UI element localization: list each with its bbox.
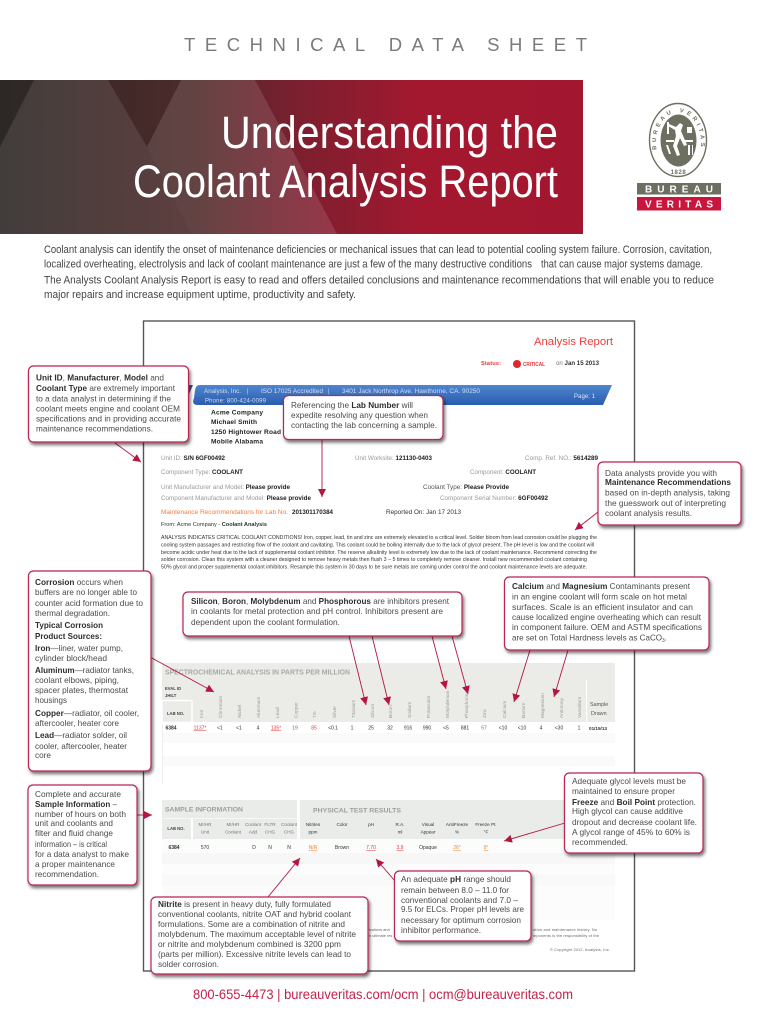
- element column headers: Magnesium: [540, 693, 546, 718]
- test values row: [168, 845, 488, 851]
- element column headers: Lead: [275, 707, 281, 718]
- table: sample information and physical test results: [162, 800, 615, 920]
- element values row: 1137*: [194, 726, 206, 732]
- element column headers: Potassium: [426, 696, 432, 718]
- callout: sample information: for a data analyst to make: [35, 849, 129, 859]
- test values row: N: [268, 845, 272, 851]
- customer address: Michael Smith: [211, 419, 257, 426]
- callout: corrosion: Corrosion occurs when: [35, 577, 123, 587]
- callout: calcium and magnesium: in component failure. OEM and ASTM specifications: [512, 622, 702, 632]
- callout: glycol: Freeze and Boil Point protection.: [572, 797, 696, 807]
- disclaimer and copyright: ation and maintenance history. No: [533, 927, 597, 932]
- column headers: Freeze Pt.: [475, 822, 497, 827]
- callout: sample information: filter and fluid change: [35, 828, 113, 838]
- lab header bar: |: [328, 389, 330, 395]
- element values row: <1: [217, 726, 223, 732]
- element column headers: Sodium: [407, 702, 413, 718]
- disclaimer and copyright: ications and: [369, 927, 390, 932]
- banner title: Understanding the: [221, 107, 558, 158]
- maintenance recommendations: 201301170384: [292, 509, 334, 516]
- element values row: 1: [351, 726, 354, 732]
- maintenance recommendations: cooling system passages and restricting flow of the coolant and cavitating. This coolant could be boiling internally due to the lack of glycol present. The pH level is low and the coolant will: [161, 542, 594, 548]
- callout: maintenance recommendations: Data analysts provide you with: [605, 468, 717, 478]
- callout: maintenance recommendations: coolant analysis results.: [605, 508, 692, 518]
- callout: corrosion: [28, 571, 151, 771]
- callout: unit id: Coolant Type are extremely important: [36, 383, 176, 393]
- callout: corrosion: housings: [35, 695, 67, 705]
- callout: lab number: Referencing the Lab Number will: [291, 400, 413, 410]
- lab header bar: ISO 17025 Accredited: [261, 389, 323, 395]
- element values row: 85: [311, 726, 317, 732]
- test values row: 7.70: [366, 845, 376, 851]
- intro text: localized overheating, electrolysis and lack of coolant maintenance are just a few of the many destructive conditions: [44, 258, 532, 270]
- test values row: 9°: [484, 845, 488, 851]
- column headers: MI/HR: [198, 822, 212, 827]
- status line: on Jan 15 2013: [556, 361, 600, 367]
- test values row: N/R: [309, 845, 318, 851]
- column headers: ppm: [309, 830, 318, 834]
- element values row: 4: [257, 726, 260, 732]
- report title: Analysis Report: [534, 336, 613, 348]
- callout: inhibitors: [183, 592, 462, 636]
- column headers: R.A.: [396, 822, 404, 827]
- unit and component fields: Unit Manufacturer and Model: Please provide: [161, 484, 291, 491]
- lab header bar: Phone: 800-424-0099: [205, 398, 267, 404]
- column headers: Coolant: [245, 822, 262, 827]
- column headers: [167, 822, 497, 834]
- column headers: Coolant: [225, 830, 242, 834]
- logo: Bureau Veritas: BUREAU VERITAS: [652, 108, 705, 150]
- banner: [0, 80, 583, 234]
- element column headers: Titanium: [351, 700, 357, 718]
- callout: glycol: [564, 773, 703, 853]
- callout: corrosion: cylinder block/head: [35, 653, 107, 663]
- unit and component fields: Component Type: COOLANT: [161, 469, 243, 476]
- element values row: [165, 726, 607, 732]
- callout: lab number: [284, 396, 443, 440]
- test values row: Brown: [335, 845, 349, 851]
- test values row: 26°: [453, 845, 461, 851]
- test values row: 570: [201, 845, 209, 851]
- callout: unit id: maintenance recommendations.: [36, 424, 153, 434]
- callout: pH: necessary for optimum corrosion: [401, 915, 521, 925]
- callout: lab number: contacting the lab concerning a sample.: [291, 420, 437, 430]
- column headers: MI/HR: [226, 822, 240, 827]
- table: spectrochemical analysis: EVAL ID: [165, 686, 181, 691]
- column headers: Add: [249, 830, 258, 834]
- intro text: that can cause major systems damage.: [541, 258, 703, 270]
- logo: Bureau Veritas: 1828: [671, 170, 686, 176]
- callout: glycol: Adequate glycol levels must be: [572, 776, 686, 786]
- unit and component fields: Unit ID: S/N 6GF00492: [161, 455, 226, 462]
- callout: pH: 9.5 for ELCs. Proper pH levels are: [401, 904, 524, 914]
- element values row: 916: [404, 726, 412, 732]
- column headers: Visual: [422, 822, 434, 827]
- test values row: 3.9: [397, 845, 404, 851]
- element column headers: Copper: [294, 702, 300, 718]
- callout: corrosion: Copper—radiator, oil cooler,: [35, 708, 139, 718]
- element values row: 57: [481, 726, 487, 732]
- callout: inhibitors: Silicon, Boron, Molybdenum and Phosphorous are inhibitors present: [191, 596, 450, 606]
- element column headers: Boron: [388, 705, 394, 718]
- intro text: [44, 244, 714, 301]
- unit and component fields: Comp. Ref. NO.: 5614289: [525, 455, 599, 462]
- callout: corrosion: Product Sources:: [35, 631, 102, 641]
- element values row: <10: [518, 726, 526, 732]
- customer address: 1250 Hightower Road: [211, 429, 281, 436]
- callout: sample information: information – is critical: [35, 839, 107, 849]
- callout: pH: conventional coolants and 7.0 –: [401, 895, 518, 905]
- callout: maintenance recommendations: [598, 462, 741, 525]
- element column headers: Zinc: [482, 708, 488, 718]
- lab header bar: [189, 385, 612, 405]
- status line: Status:: [481, 361, 501, 367]
- unit and component fields: Unit Worksite: 121130-0403: [355, 455, 433, 462]
- element column headers: Silver: [332, 706, 338, 718]
- callout: sample information: [28, 785, 137, 885]
- callout: calcium and magnesium: surfaces. Scale is an efficient insulator and can: [512, 602, 693, 612]
- page heading: technical data sheet: TECHNICAL DATA SHEET: [184, 34, 587, 55]
- callout: corrosion: cooler, aftercooler, heater: [35, 741, 127, 751]
- callout: sample information: Sample Information –: [35, 799, 117, 809]
- callout: sample information: unit and coolants and: [35, 818, 113, 828]
- callout: unit id: specifications and in providing accurate: [36, 414, 181, 424]
- callout: inhibitors: in coolants for metal protection and pH control. Inhibitors present are: [191, 606, 443, 616]
- lab header bar: 3401 Jack Northrop Ave. Hawthorne, CA. 90250: [342, 389, 481, 395]
- element column headers: Barium: [521, 703, 527, 718]
- column headers: °F: [484, 830, 489, 834]
- callout: glycol: A glycol range of 45% to 60% is: [572, 827, 690, 837]
- maintenance recommendations: Reported On: Jan 17 2013: [386, 509, 462, 516]
- column headers: Color: [337, 822, 348, 827]
- callout: calcium and magnesium: 3: [662, 638, 665, 644]
- maintenance recommendations: [161, 509, 597, 570]
- element values row: 6384: [165, 726, 177, 732]
- callout: sample information: recommendation.: [35, 869, 99, 879]
- element column headers: Molybdenum: [445, 691, 451, 718]
- element column headers: Chromium: [218, 696, 224, 718]
- element values row: <30: [555, 726, 563, 732]
- column headers: %: [455, 830, 459, 834]
- callout: sample information: a proper maintenance: [35, 859, 115, 869]
- element column headers: Antimony: [559, 697, 565, 718]
- column headers: LAB NO.: [167, 826, 185, 831]
- table: sample information and physical test results: SAMPLE INFORMATION: [165, 806, 243, 814]
- element column headers: Aluminum: [256, 697, 262, 718]
- element values row: 01/15/13: [589, 726, 607, 731]
- callout: pH: [394, 871, 531, 941]
- callout: lab number: expedite resolving any question when: [291, 410, 428, 420]
- callout: corrosion: Iron—liner, water pump,: [35, 643, 123, 653]
- callout: corrosion: buffers are no longer able to: [35, 587, 137, 597]
- customer address: [211, 410, 281, 446]
- test values row: Opaque: [419, 845, 437, 851]
- panel: sample analysis report document: [144, 321, 634, 971]
- element values row: 990: [423, 726, 431, 732]
- lab header bar: Page: 1: [574, 394, 596, 400]
- element values row: 4: [540, 726, 543, 732]
- element column headers: Vanadium: [577, 697, 583, 718]
- column headers: FLTR: [264, 822, 276, 827]
- column headers: Coolant: [281, 822, 298, 827]
- callout: corrosion: Lead—radiator solder, oil: [35, 730, 127, 740]
- callout: corrosion: Typical Corrosion: [35, 620, 103, 630]
- logo: Bureau Veritas: [637, 102, 721, 210]
- column headers: Nitrites: [306, 822, 321, 827]
- unit and component fields: Component: COOLANT: [470, 469, 536, 476]
- callout: calcium and magnesium: in an engine coolant will form scale on hot metal: [512, 592, 687, 602]
- callout: calcium and magnesium: Calcium and Magnesium Contaminants present: [512, 581, 691, 591]
- disclaimer and copyright: mponents is the responsibility of the: [533, 933, 599, 938]
- customer address: Mobile Alabama: [211, 438, 263, 446]
- callout: glycol: maintained to ensure proper: [572, 786, 675, 796]
- element values row: <5: [443, 726, 449, 732]
- test values row: D: [252, 845, 256, 851]
- callout: nitrite: Nitrite is present in heavy duty, fully formulated: [158, 899, 331, 909]
- callout: sample information: number of hours on both: [35, 809, 126, 819]
- callout: maintenance recommendations: Maintenance Recommendations: [605, 477, 731, 487]
- callout: nitrite: conventional coolants, nitrite OAT and hybrid coolant: [158, 909, 352, 919]
- footer contact line: 800-655-4473 | bureauveritas.com/ocm | ocm@bureauveritas.com: [193, 986, 573, 1002]
- callout: glycol: High glycol can cause additive: [572, 806, 683, 816]
- logo: Bureau Veritas: VERITAS: [645, 200, 713, 210]
- callout: pH: An adequate pH range should: [401, 874, 511, 884]
- callout: pH: inhibitor performance.: [401, 925, 481, 935]
- table: spectrochemical analysis: JHILT: [165, 693, 177, 698]
- maintenance recommendations: 50% glycol and proper supplemental coolant inhibitors. Resample this system in 30 days to be sure metals are coming under control the and coolant maintenance levels are adequate.: [161, 564, 587, 570]
- table: spectrochemical analysis: SPECTROCHEMICAL ANALYSIS IN PARTS PER MILLION: [165, 670, 350, 676]
- test values row: N: [287, 845, 291, 851]
- element values row: <10: [499, 726, 507, 732]
- maintenance recommendations: From: Acme Company - Coolant Analysis: [161, 522, 267, 528]
- element column headers: Silicon: [370, 704, 376, 718]
- unit and component fields: [161, 455, 599, 502]
- callout: pH: remain between 8.0 – 11.0 for: [401, 885, 509, 895]
- callout: corrosion: spacer plates, thermostat: [35, 685, 129, 695]
- callout: nitrite: solder corrosion.: [158, 959, 219, 969]
- element values row: 32: [387, 726, 393, 732]
- column headers: CHG: [265, 830, 276, 834]
- column headers: CHG: [284, 830, 295, 834]
- unit and component fields: Component Serial Number: 6GF00492: [440, 495, 549, 502]
- arrows from callouts to report: [115, 440, 598, 897]
- element values row: 25: [368, 726, 374, 732]
- callout: nitrite: or nitrite and molybdenum combined is 3200 ppm: [158, 939, 341, 949]
- callout: glycol: recommended.: [572, 837, 628, 847]
- element column headers: Nickel: [237, 705, 243, 718]
- callout: unit id: to a data analyst in determining if the: [36, 394, 171, 404]
- maintenance recommendations: Maintenance Recommendations for Lab No.: [161, 509, 288, 516]
- status line: [481, 360, 600, 368]
- callout: calcium and magnesium: are set on Total Hardness levels as CaCO: [512, 632, 666, 642]
- element values row: <0.1: [328, 726, 338, 732]
- callout: calcium and magnesium: cause localized engine overheating which can result: [512, 612, 702, 622]
- element column headers: Calcium: [502, 701, 508, 718]
- element values row: 19: [292, 726, 298, 732]
- element column headers: [199, 689, 583, 718]
- maintenance recommendations: ANALYSIS INDICATES CRITICAL COOLANT CONDITIONS! Iron, copper, lead, tin and zinc are extremely elevated to a critical level. Solder bloom from lead corrosion could be plugging the: [161, 535, 597, 541]
- callout: corrosion: aftercooler, heater core: [35, 718, 119, 728]
- element values row: 881: [461, 726, 469, 732]
- disclaimer and copyright: e ultimate res: [369, 933, 392, 938]
- callout: unit id: coolant meets engine and coolant OEM: [36, 404, 180, 414]
- banner title: Coolant Analysis Report: [133, 156, 558, 207]
- column headers: pH: [368, 822, 374, 827]
- callout: corrosion: Aluminum—radiator tanks,: [35, 665, 134, 675]
- callout: calcium and magnesium: [504, 577, 709, 650]
- element column headers: Tin: [312, 711, 318, 718]
- element column headers: Iron: [199, 709, 205, 718]
- test values row: 6384: [168, 845, 180, 851]
- callout: corrosion: coolant elbows, piping,: [35, 675, 119, 685]
- unit and component fields: Coolant Type: Please Provide: [423, 484, 510, 491]
- status line: CRITICAL: [523, 362, 546, 368]
- table: spectrochemical analysis: LAB NO.: [167, 711, 184, 716]
- disclaimer and copyright: © Copyright 2012, Analysts, Inc.: [550, 947, 610, 952]
- callout: unit id: [28, 366, 188, 442]
- callout: unit id: Unit ID, Manufacturer, Model and: [36, 372, 164, 382]
- intro text: major repairs and increase equipment uptime, productivity and safety.: [44, 289, 356, 301]
- maintenance recommendations: become acidic under heat due to the lack of supplemental coolant inhibitor. The reserve alkalinity level is extremely low due to the lack of coolant maintenance. Recommend correcting the: [161, 550, 597, 556]
- column headers: AntiFreeze: [446, 822, 469, 827]
- banner title: [133, 107, 558, 207]
- column headers: Appear: [421, 830, 436, 834]
- callout: inhibitors: dependent upon the coolant formulation.: [191, 617, 340, 627]
- table: spectrochemical analysis: [162, 663, 615, 784]
- callout: corrosion: counter acid formation due to: [35, 598, 143, 608]
- callout: maintenance recommendations: based on in-depth analysis, taking: [605, 488, 730, 498]
- element values row: 135*: [271, 726, 281, 732]
- table: spectrochemical analysis: Drawn: [591, 711, 607, 717]
- callout: corrosion: core: [35, 750, 51, 760]
- lab header bar: |: [247, 389, 249, 395]
- callout: maintenance recommendations: the guesswork out of interpreting: [605, 498, 726, 508]
- lab header bar: Analysis, Inc.: [204, 389, 241, 395]
- callout: corrosion: thermal degradation.: [35, 608, 110, 618]
- unit and component fields: Component Manufacturer and Model: Please provide: [161, 495, 312, 502]
- disclaimer and copyright: [369, 927, 610, 952]
- element column headers: Phosphorous: [464, 689, 470, 718]
- element values row: 1: [578, 726, 581, 732]
- element values row: <1: [236, 726, 242, 732]
- logo: Bureau Veritas: BUREAU: [645, 184, 713, 196]
- table: spectrochemical analysis: Sample: [590, 702, 608, 708]
- callout: glycol: dropout and decrease coolant life.: [572, 817, 697, 827]
- callout: sample information: Complete and accurate: [35, 789, 121, 799]
- maintenance recommendations: solder corrosion. Clean this system with a cleaner designed to remove heavy metals then flush 3 – 5 times to completely remove cleaner. Install new recommended coolant containing: [161, 557, 587, 563]
- callout: nitrite: [151, 897, 368, 974]
- column headers: ml: [398, 830, 402, 834]
- table: sample information and physical test results: PHYSICAL TEST RESULTS: [313, 808, 402, 814]
- callout: nitrite: (parts per million). Excessive nitrite levels can lead to: [158, 949, 351, 959]
- column headers: Unit: [201, 830, 210, 834]
- callout: nitrite: formulations. Some are a combination of nitrite and: [158, 919, 345, 929]
- customer address: Acme Company: [211, 410, 263, 416]
- callout: calcium and magnesium: .: [665, 632, 667, 642]
- callout: nitrite: molybdenum. The maximum acceptable level of nitrite: [158, 929, 356, 939]
